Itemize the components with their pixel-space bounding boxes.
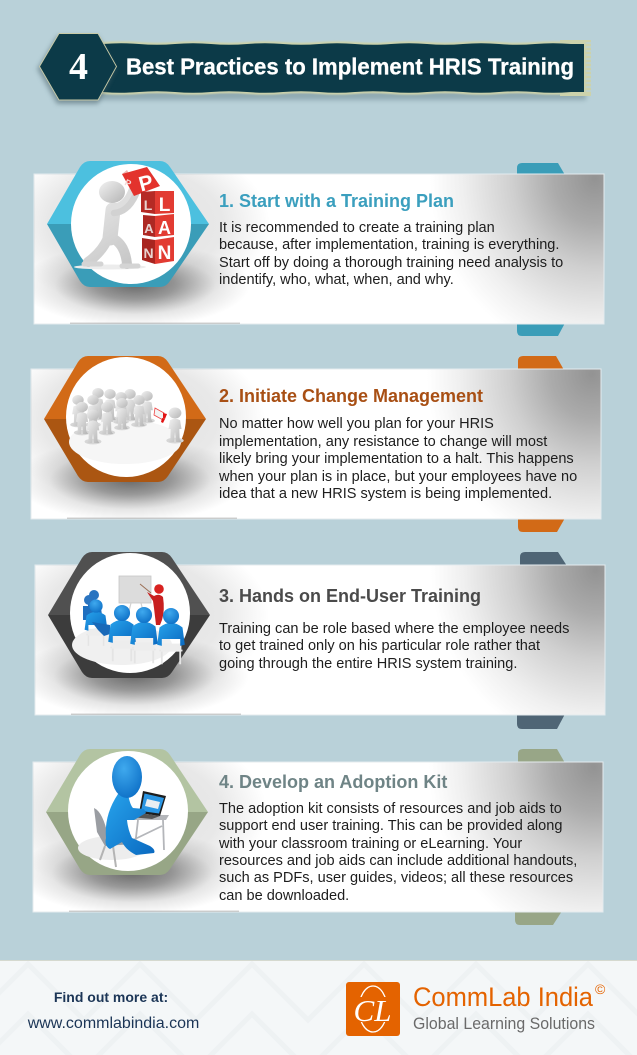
desk — [133, 815, 169, 820]
panel: step 3 — [34, 552, 606, 729]
hexagon badge — [47, 161, 209, 287]
find out more label: Find out more at: — [54, 989, 168, 1005]
block P — [122, 170, 138, 195]
head — [112, 756, 142, 798]
logo tagline: Global Learning Solutions — [413, 1015, 595, 1033]
panel: step 1 — [34, 161, 604, 336]
icon: person at laptop — [78, 756, 169, 867]
logo mark — [346, 982, 400, 1036]
board — [119, 576, 151, 603]
footer — [0, 960, 637, 1055]
tabs — [517, 163, 565, 336]
hexagon badge — [44, 356, 206, 482]
icon: figure stacking PLAN blocks — [74, 167, 174, 270]
card — [32, 762, 604, 912]
banner shadow — [60, 52, 586, 100]
body text: resources and job aids can include additional handouts, — [219, 853, 577, 869]
tabs — [515, 749, 565, 925]
title numeral: 4 — [69, 46, 88, 88]
banner stripes — [560, 40, 591, 96]
panel: step 2 — [30, 356, 602, 532]
hexagon badge — [46, 749, 208, 875]
logo copyright: © — [595, 981, 606, 997]
body text: It is recommended to create a training plan — [219, 220, 495, 236]
body text: such as PDFs, user guides, videos; all these resources — [219, 870, 573, 886]
title banner — [37, 34, 591, 104]
icon: figure stacking PLAN blocks: L — [144, 197, 153, 213]
card — [34, 174, 604, 324]
body text: can be downloaded. — [219, 888, 349, 904]
icon: figure stacking PLAN blocks: L — [159, 195, 171, 216]
tabs — [517, 552, 567, 729]
laptop — [139, 791, 166, 816]
icon: figure stacking PLAN blocks: N — [158, 243, 171, 264]
icon: figure stacking PLAN blocks: A — [144, 221, 154, 236]
icon: figure stacking PLAN blocks: N — [143, 245, 154, 261]
heading: 4. Develop an Adoption Kit — [219, 772, 447, 792]
heading: 2. Initiate Change Management — [219, 386, 483, 406]
block A — [143, 215, 155, 237]
body text: to get trained only on his particular role rather that — [219, 638, 540, 654]
body text: with your classroom training or eLearning. Your — [218, 836, 522, 852]
body text: support end user training. This can be provided along — [219, 818, 562, 834]
chair — [94, 808, 133, 846]
body text: idea that a new HRIS system is being implemented. — [219, 486, 552, 502]
block N — [142, 238, 155, 264]
body text: Training can be role based where the employee needs — [219, 621, 569, 637]
icon: figure stacking PLAN blocks: P — [123, 177, 133, 189]
icon: figure stacking PLAN blocks: P — [136, 171, 156, 196]
banner torn edge — [103, 43, 584, 93]
title hexagon — [40, 34, 116, 100]
icon: trainer and seated audience — [72, 576, 185, 665]
body text: going through the entire HRIS system training. — [219, 656, 517, 672]
heading: 1. Start with a Training Plan — [219, 191, 454, 211]
card — [34, 564, 606, 716]
body text: when your plan is in place, but your employees have no — [218, 469, 577, 485]
body text: The adoption kit consists of resources and job aids to — [219, 801, 562, 817]
tabs — [518, 356, 565, 532]
hexagon badge — [48, 552, 210, 678]
trainer — [140, 584, 151, 593]
banner body — [103, 43, 584, 93]
website: www.commlabindia.com — [27, 1015, 199, 1032]
title hexagon shadow — [37, 36, 116, 104]
back row — [88, 590, 102, 615]
body text: because, after implementation, training is everything. — [219, 237, 559, 253]
title text: Best Practices to Implement HRIS Training — [126, 54, 574, 80]
body text: indentify, who, what, when, and why. — [219, 272, 454, 288]
panel: step 4 — [32, 749, 604, 925]
body text: Start off by doing a thorough training need analysis to — [219, 255, 563, 271]
heading: 3. Hands on End-User Training — [219, 586, 481, 606]
front row — [108, 605, 136, 661]
logo mark: CL — [354, 993, 392, 1028]
logo name: CommLab India — [413, 982, 594, 1012]
block L — [141, 191, 155, 214]
logo — [346, 981, 606, 1036]
figure limbs — [110, 210, 113, 238]
body text: likely bring your implementation to a halt. This happens — [219, 451, 574, 467]
body — [106, 794, 154, 855]
card — [30, 368, 602, 520]
icon: crowd and megaphone speaker — [69, 388, 184, 464]
icon: figure stacking PLAN blocks: A — [158, 218, 171, 238]
body text: implementation, any resistance to change will most — [219, 434, 547, 450]
body text: No matter how well you plan for your HRIS — [219, 416, 494, 432]
